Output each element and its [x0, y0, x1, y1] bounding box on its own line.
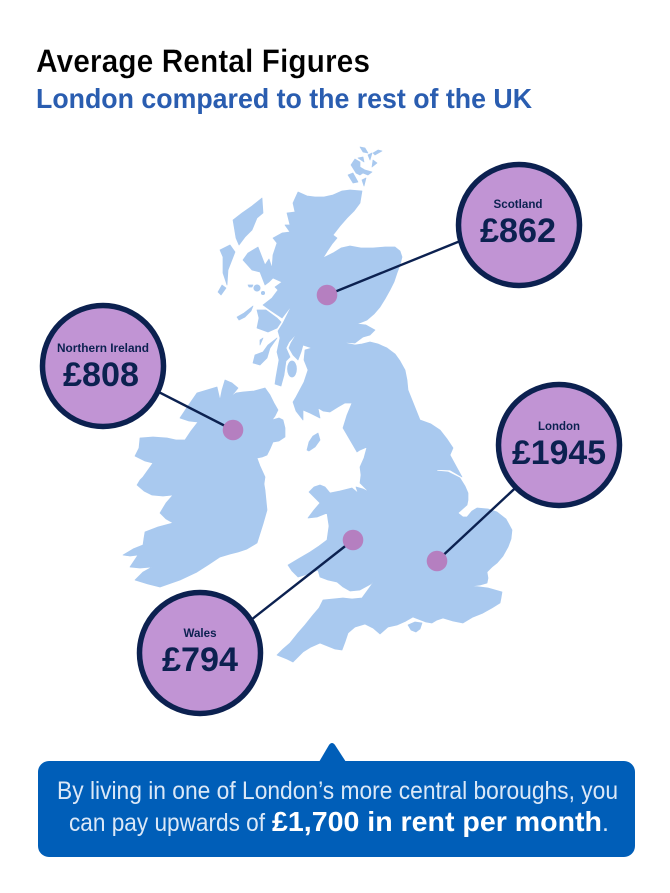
callout — [38, 743, 635, 857]
map: Orkney south — [348, 173, 358, 183]
map: Tiree and Coll — [237, 306, 253, 320]
badge: Wales — [140, 592, 260, 714]
title: Average Rental Figures — [36, 43, 370, 79]
badge: Northern Ireland — [42, 306, 164, 426]
map: Uist — [220, 245, 235, 285]
connector: London — [437, 465, 540, 561]
connector: Wales — [200, 540, 353, 660]
map: Canna — [248, 285, 253, 287]
map: Colonsay — [260, 338, 263, 345]
badge: Scotland: Scotland — [494, 199, 542, 211]
map: Isle of Wight — [408, 622, 422, 632]
map: Rum — [254, 285, 260, 291]
callout text line 1: By living in one of London’s more central boroughs, you — [57, 777, 618, 805]
callout text line 2: . — [602, 809, 609, 837]
subtitle: London compared to the rest of the UK — [36, 83, 532, 114]
map: Eigg — [261, 291, 265, 295]
badge: Wales: £794 — [162, 641, 238, 679]
badge: Wales: Wales — [184, 628, 216, 640]
badge: London: London — [538, 421, 580, 433]
callout text line 2: can pay upwards of — [69, 809, 265, 837]
marker: Northern Ireland — [223, 420, 243, 440]
badge: Scotland — [458, 164, 580, 286]
badge: London — [498, 384, 620, 506]
map: Orkney north islands — [358, 147, 382, 167]
map: Arran — [288, 361, 296, 377]
map: Isle of Man — [307, 433, 320, 451]
connector: Scotland — [327, 233, 480, 295]
map: Ireland — [123, 380, 285, 587]
badge: Northern Ireland: Northern Ireland — [57, 343, 149, 355]
marker: London — [427, 551, 447, 571]
map: Barra — [218, 285, 226, 295]
map: Great Britain — [243, 190, 512, 662]
callout box — [38, 761, 635, 857]
marker: Wales — [343, 530, 363, 550]
map of UK and Ireland — [123, 147, 512, 662]
badge: London: £1945 — [512, 434, 606, 472]
map: Islay and Jura — [253, 338, 277, 365]
callout pointer — [319, 743, 346, 762]
badge: Scotland: £862 — [480, 212, 556, 250]
connector: Northern Ireland — [100, 362, 233, 430]
map: Lewis and Harris — [233, 198, 263, 245]
marker: Scotland — [317, 285, 337, 305]
callout text line 2: £1,700 in rent per month — [272, 806, 602, 837]
map: Mull — [257, 310, 281, 332]
map: Orkney mainland — [351, 159, 372, 175]
map: Orkney Hoy — [362, 178, 366, 186]
callout text line 2 — [69, 806, 609, 837]
badge: Northern Ireland: £808 — [63, 356, 139, 394]
